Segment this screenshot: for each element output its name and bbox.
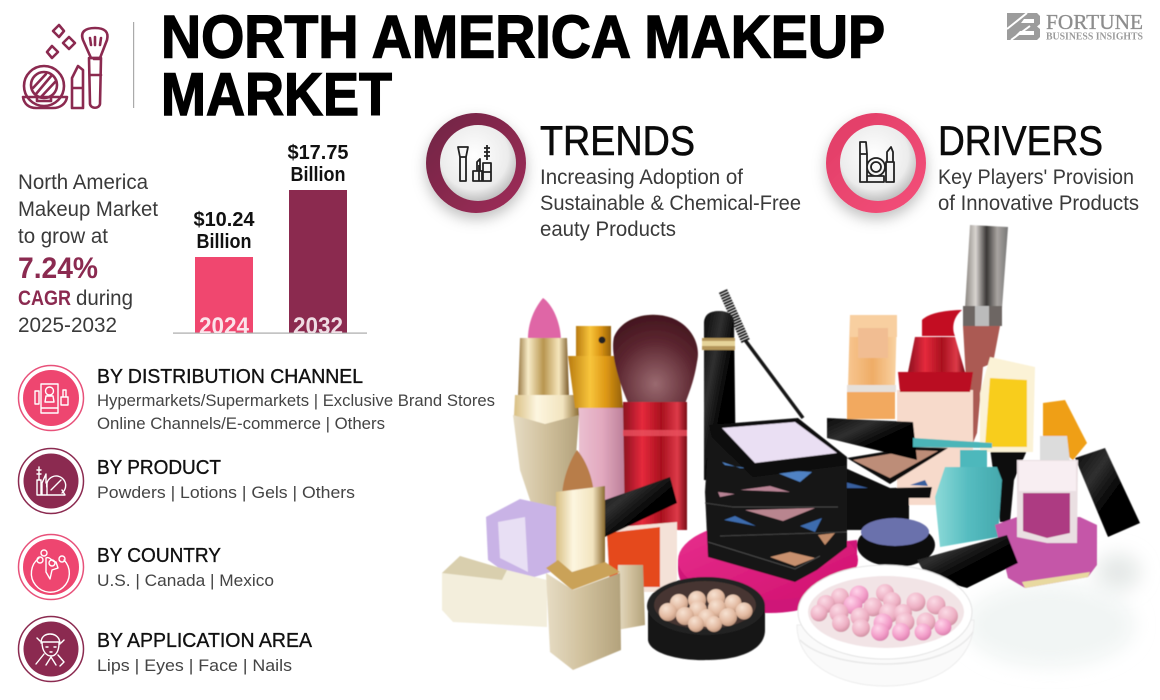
gloss tube xyxy=(963,225,1008,450)
orange nail polish xyxy=(1040,400,1087,462)
navy powder jar xyxy=(857,518,935,567)
logo: Fortune Business Insights xyxy=(1007,10,1143,42)
bronze lipstick xyxy=(546,450,645,670)
peach bottle xyxy=(847,315,897,419)
segment: country: BY COUNTRY xyxy=(97,545,221,567)
panel: trends: eauty Products xyxy=(540,218,676,241)
yellow bottle xyxy=(980,357,1035,522)
bar chart: $10.24 xyxy=(194,209,255,231)
text block: market growth: CAGR xyxy=(18,287,71,310)
pink nail polish xyxy=(995,460,1097,588)
cream lipstick cap xyxy=(442,556,547,627)
icon: mascara and compact xyxy=(18,448,84,514)
lavender nail polish xyxy=(486,499,557,582)
panel: trends: Increasing Adoption of xyxy=(540,166,743,189)
icon: face with brushes xyxy=(18,616,84,682)
logo: Fortune Business Insights: FORTUNE xyxy=(1046,10,1143,34)
segment: application area: BY APPLICATION AREA xyxy=(97,630,313,652)
bar chart xyxy=(173,142,367,340)
teal nail polish xyxy=(935,450,1002,547)
magenta round base xyxy=(678,520,858,613)
title: NORTH AMERICA MAKEUP xyxy=(161,4,885,70)
dark block behind stack xyxy=(843,495,909,530)
text block: market growth: to grow at xyxy=(18,225,108,248)
panel: drivers: DRIVERS xyxy=(938,117,1103,164)
segment: product xyxy=(18,448,355,514)
eyeshadow compact stack xyxy=(705,418,847,582)
text block: market growth: 7.24% xyxy=(18,252,98,285)
black tilted cap left xyxy=(605,477,677,537)
brown compact xyxy=(843,447,948,498)
mascara tube xyxy=(702,311,736,480)
segment: application area: Lips | Eyes | Face | Nails xyxy=(97,656,292,675)
segment: distribution channel xyxy=(18,366,495,433)
icon: trends badge xyxy=(426,113,526,213)
black cap with teal applicator xyxy=(827,418,992,460)
segment: distribution channel: Hypermarkets/Supermarkets | Exclusive Brand Stores xyxy=(97,391,495,410)
text block: market growth: Makeup Market xyxy=(18,198,158,221)
segment: country xyxy=(18,534,274,600)
segment: application area xyxy=(18,616,313,682)
perfume bottle xyxy=(568,326,625,505)
black lying cap xyxy=(917,535,1018,588)
white bead compact xyxy=(797,565,974,686)
text block: market growth: 2025-2032 xyxy=(18,314,117,337)
panel: drivers xyxy=(826,113,1139,215)
panel: drivers: of Innovative Products xyxy=(938,192,1139,215)
segment: product: Powders | Lotions | Gels | Others xyxy=(97,483,355,502)
panel: drivers: Key Players' Provision xyxy=(938,166,1134,189)
bar chart: 2024 xyxy=(199,313,250,340)
panel: trends: Sustainable & Chemical-Free xyxy=(540,192,801,215)
blush brush xyxy=(613,315,698,530)
black tilted cap xyxy=(1075,448,1140,537)
title xyxy=(161,4,885,128)
bar chart: 2032 xyxy=(293,313,343,340)
text block: market growth: North America xyxy=(18,171,148,194)
text block: market growth: during xyxy=(76,287,133,310)
segment: distribution channel: Online Channels/E-commerce | Others xyxy=(97,414,385,433)
orange nail polish lower left xyxy=(606,522,677,592)
icon: globe xyxy=(18,534,84,600)
icon: phone with cosmetics xyxy=(18,366,84,430)
segment: distribution channel: BY DISTRIBUTION CHANNEL xyxy=(97,366,363,388)
text block: market growth xyxy=(18,171,158,337)
black bead jar xyxy=(647,577,765,660)
logo: Fortune Business Insights: BUSINESS INSIGHTS xyxy=(1046,32,1143,42)
segment: country: U.S. | Canada | Mexico xyxy=(97,571,274,590)
red foundation bottle xyxy=(897,310,973,505)
segment: product: BY PRODUCT xyxy=(97,457,221,479)
photo: cosmetics collection xyxy=(442,225,1140,686)
icon: drivers badge xyxy=(826,113,926,213)
bar chart: Billion xyxy=(196,231,252,253)
panel: trends xyxy=(426,113,801,241)
header icon: makeup set xyxy=(23,25,108,108)
mascara wand xyxy=(723,291,803,418)
bar chart: $17.75 xyxy=(288,142,348,164)
tall lipstick xyxy=(513,298,579,512)
bar chart: Billion xyxy=(290,164,346,186)
panel: trends: TRENDS xyxy=(540,117,695,164)
title: MARKET xyxy=(161,61,392,128)
